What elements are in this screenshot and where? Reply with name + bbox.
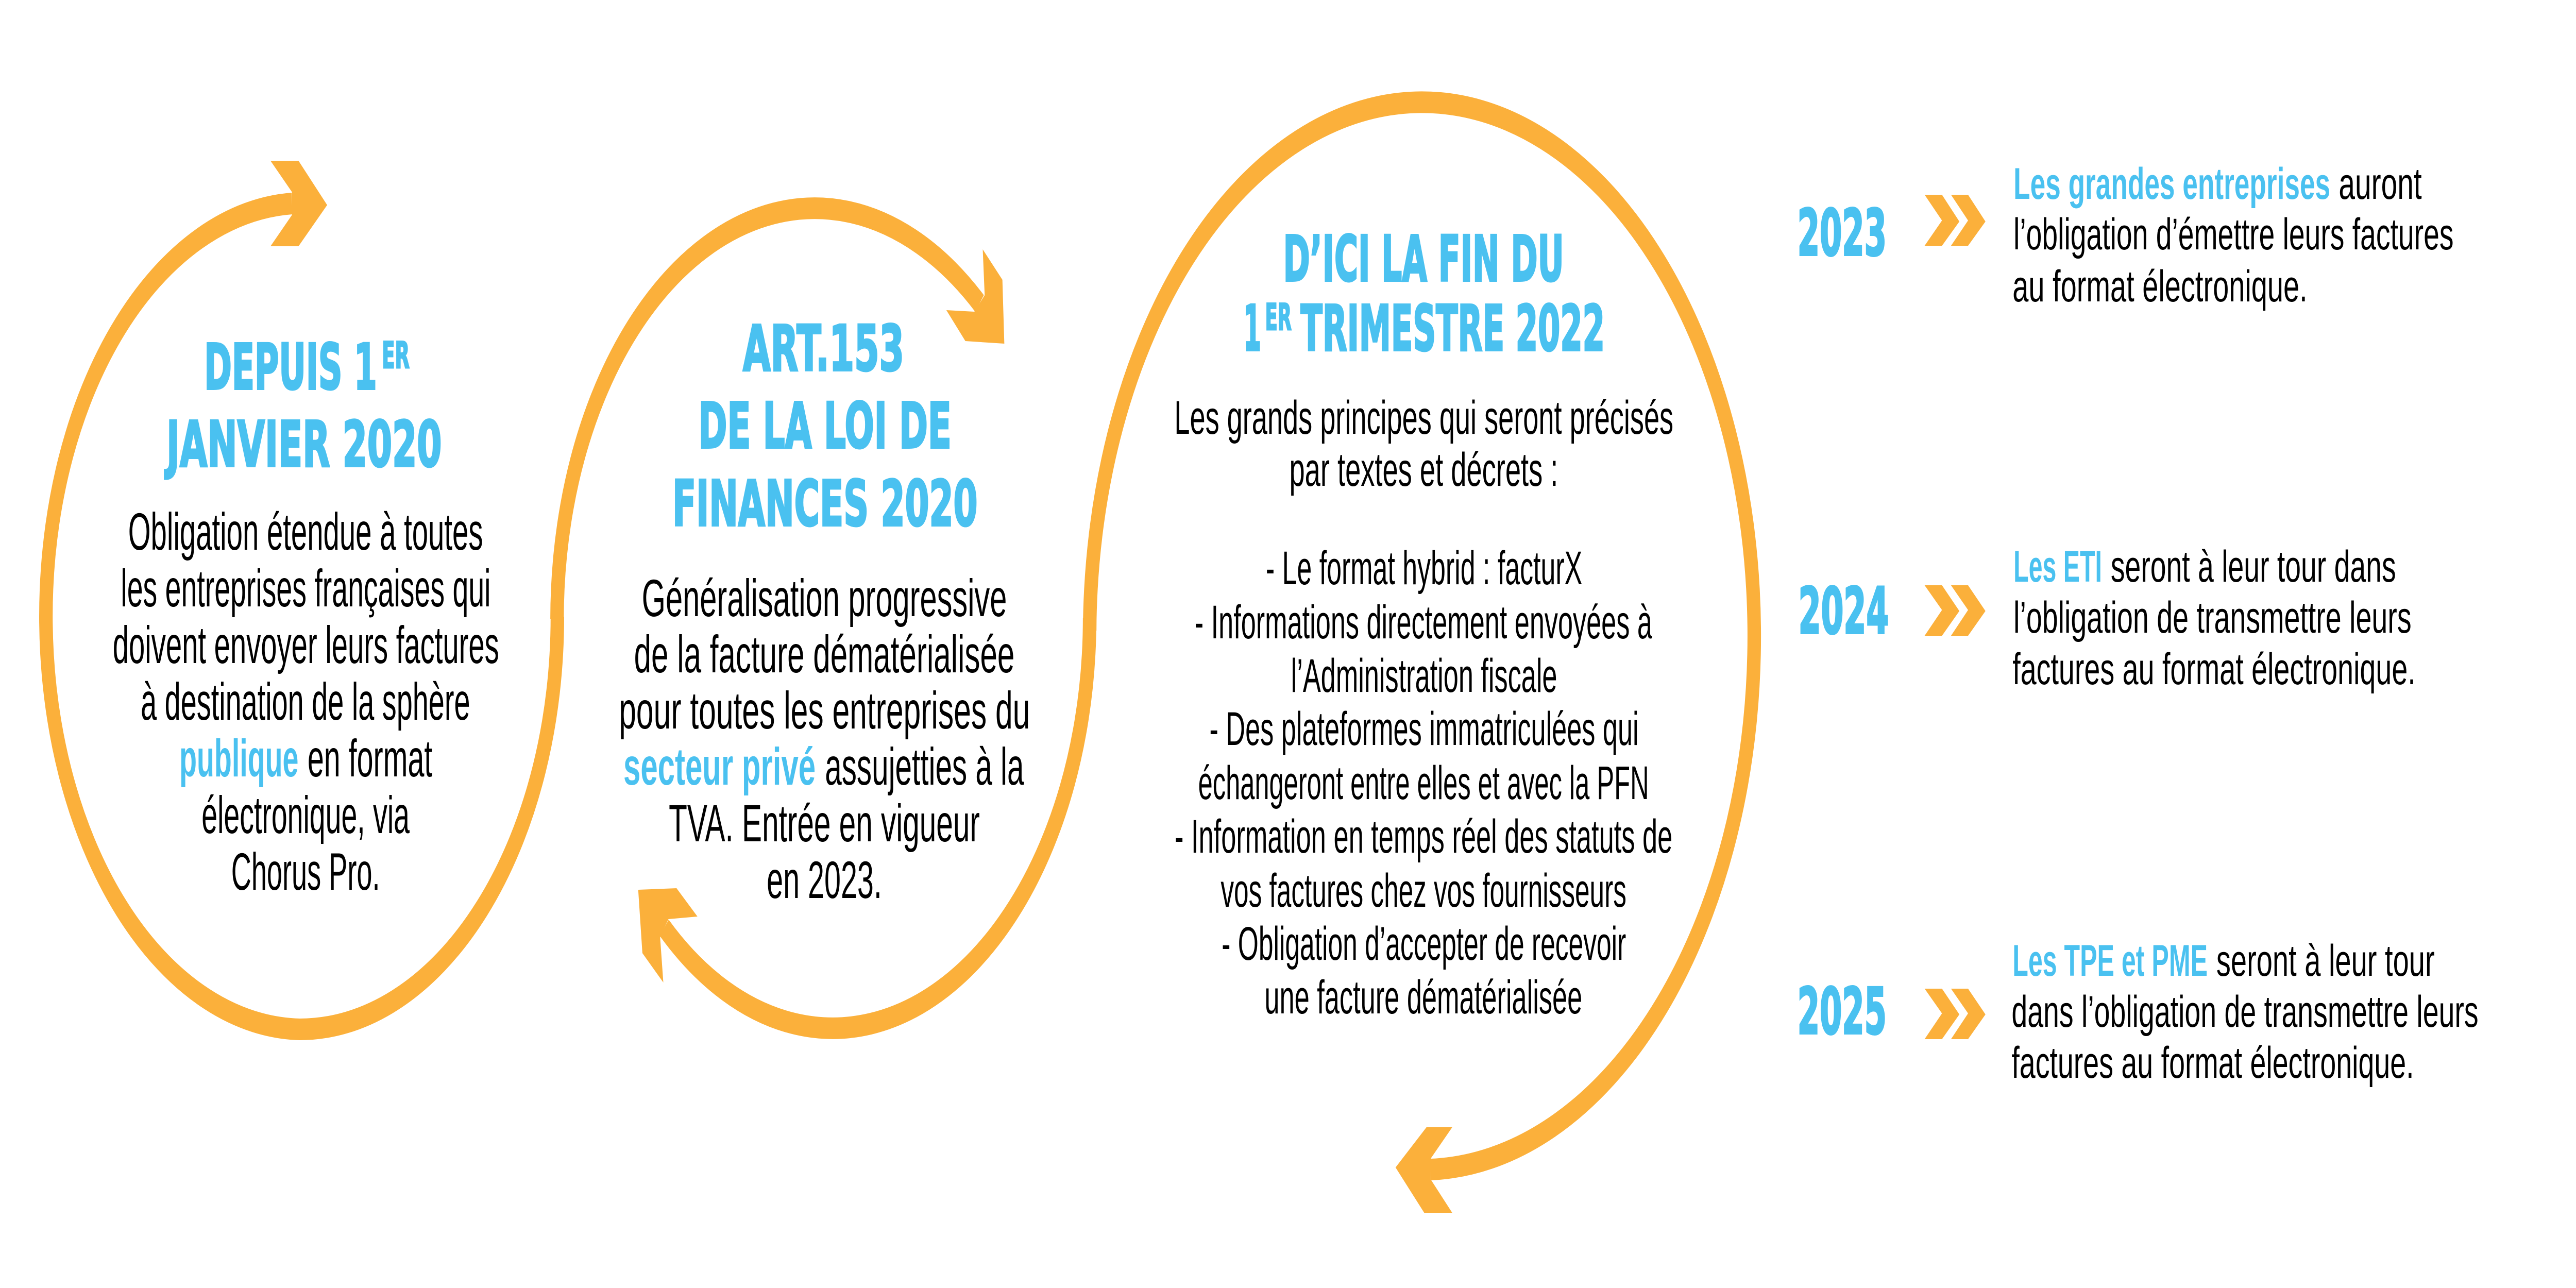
heading: depuis 1er janvier 2020: DEPUIS 1 <box>204 331 377 404</box>
text block: généralisation: secteur privé <box>623 738 816 796</box>
text block: obligation: les entreprises françaises qui <box>121 560 490 618</box>
panel: timeline 2023 <box>1798 159 2454 311</box>
heading: depuis 1er janvier 2020: JANVIER 2020 <box>164 408 442 481</box>
icon: arrowhead 1 <box>270 161 327 246</box>
text block: généralisation: Généralisation progressive <box>642 569 1007 628</box>
text block: généralisation <box>619 569 1030 910</box>
text block: grandes entreprises <box>2012 159 2454 311</box>
text block: grandes entreprises: au format électronique. <box>2012 262 2308 311</box>
heading: d'ici la fin du 1er trimestre 2022: ER <box>1265 296 1292 338</box>
panel: timeline 2024 <box>1799 542 2416 694</box>
icon: double chevron 2025 <box>1925 989 1986 1039</box>
ring 3 <box>1090 102 1754 1170</box>
text block: ETI: l’obligation de transmettre leurs <box>2013 593 2412 642</box>
panel: text art.153 <box>619 312 1030 910</box>
heading: d'ici la fin du 1er trimestre 2022: D’ICI LA FIN DU <box>1283 223 1564 296</box>
text block: grands principes: - Informations directement envoyées à <box>1195 596 1652 649</box>
text block: généralisation: de la facture dématérialisée <box>634 625 1014 684</box>
text block: obligation: publique <box>179 730 298 788</box>
text block: grands principes: - Le format hybrid : facturX <box>1266 542 1582 595</box>
text block: grands principes: Les grands principes qui seront précisés <box>1174 392 1673 444</box>
text block: TPE et PME: factures au format électronique. <box>2011 1038 2414 1088</box>
heading: depuis 1er janvier 2020: ER <box>382 334 410 377</box>
text block: ETI: Les ETI <box>2013 542 2102 591</box>
heading: art.153 de la loi de finances 2020: FINANCES 2020 <box>672 467 978 540</box>
text block: obligation: doivent envoyer leurs factures <box>113 616 499 675</box>
text block: TPE et PME: dans l’obligation de transmettre leurs <box>2011 987 2479 1037</box>
year 2023: 2023 <box>1798 196 1887 270</box>
text block: grands principes: l’Administration fiscale <box>1291 650 1557 702</box>
text block: généralisation: assujetties à la <box>825 738 1024 796</box>
text block: ETI <box>2012 542 2416 694</box>
text block: obligation <box>113 503 499 902</box>
text block: généralisation: pour toutes les entreprises du <box>619 682 1030 740</box>
text block: grands principes: - Des plateformes immatriculées qui <box>1210 703 1639 755</box>
text block: obligation: en format <box>308 730 432 788</box>
text block: ETI: factures au format électronique. <box>2012 645 2416 694</box>
panel: text d'ici la fin du 1er trimestre 2022 <box>1174 223 1673 1024</box>
text block: obligation: électronique, via <box>201 786 410 845</box>
text block: grands principes <box>1174 392 1673 1024</box>
heading: d'ici la fin du 1er trimestre 2022 <box>1243 223 1605 365</box>
heading: d'ici la fin du 1er trimestre 2022: 1 <box>1243 292 1261 365</box>
heading: d'ici la fin du 1er trimestre 2022: TRIMESTRE 2022 <box>1300 292 1605 365</box>
panel: circular arrow 3 <box>1090 102 1754 1213</box>
text block: obligation: Obligation étendue à toutes <box>128 503 483 562</box>
text block: grandes entreprises: auront <box>2338 159 2422 209</box>
ring 2 lower arc <box>664 618 1090 1028</box>
text block: grands principes: échangeront entre elles et avec la PFN <box>1198 757 1649 809</box>
heading: art.153 de la loi de finances 2020: ART.153 <box>743 312 904 385</box>
text block: TPE et PME <box>2011 936 2479 1088</box>
icon: arrowhead bottom left <box>638 888 698 982</box>
text block: TPE et PME: seront à leur tour <box>2216 936 2435 986</box>
text block: grands principes: - Information en temps réel des statuts de <box>1175 810 1672 863</box>
year 2025: 2025 <box>1798 975 1887 1049</box>
year 2024: 2024 <box>1799 574 1889 649</box>
heading: art.153 de la loi de finances 2020: DE LA LOI DE <box>699 389 952 463</box>
text block: généralisation: TVA. Entrée en vigueur <box>669 794 980 853</box>
text block: grandes entreprises: Les grandes entreprises <box>2013 159 2330 209</box>
panel: timeline 2025 <box>1798 936 2479 1088</box>
icon: double chevron 2024 <box>1925 585 1986 636</box>
icon: double chevron 2023 <box>1925 195 1986 246</box>
heading: depuis 1er janvier 2020 <box>164 331 442 481</box>
text block: grands principes: une facture dématérialisée <box>1264 971 1582 1024</box>
text block: TPE et PME: Les TPE et PME <box>2012 936 2208 986</box>
text block: grands principes: par textes et décrets : <box>1289 444 1558 496</box>
panel: circular arrow 2 <box>557 208 1090 1028</box>
text block: grands principes: vos factures chez vos fournisseurs <box>1221 865 1626 917</box>
text block: ETI: seront à leur tour dans <box>2111 542 2396 591</box>
icon: arrowhead 3 <box>1396 1127 1452 1213</box>
text block: obligation: à destination de la sphère <box>141 673 470 732</box>
panel: circular arrow 1 <box>46 161 557 1029</box>
ring 2 upper arc <box>557 208 979 619</box>
text block: grands principes: - Obligation d’accepter de recevoir <box>1222 918 1626 970</box>
heading: art.153 de la loi de finances 2020 <box>672 312 978 540</box>
text block: obligation: Chorus Pro. <box>231 843 380 902</box>
text block: grandes entreprises: l’obligation d’émettre leurs factures <box>2013 210 2454 259</box>
icon: arrowhead top right <box>946 249 1004 344</box>
ring 1 <box>46 204 557 1029</box>
text block: généralisation: en 2023. <box>767 851 882 910</box>
panel: text depuis 1er janvier 2020 <box>113 331 499 902</box>
